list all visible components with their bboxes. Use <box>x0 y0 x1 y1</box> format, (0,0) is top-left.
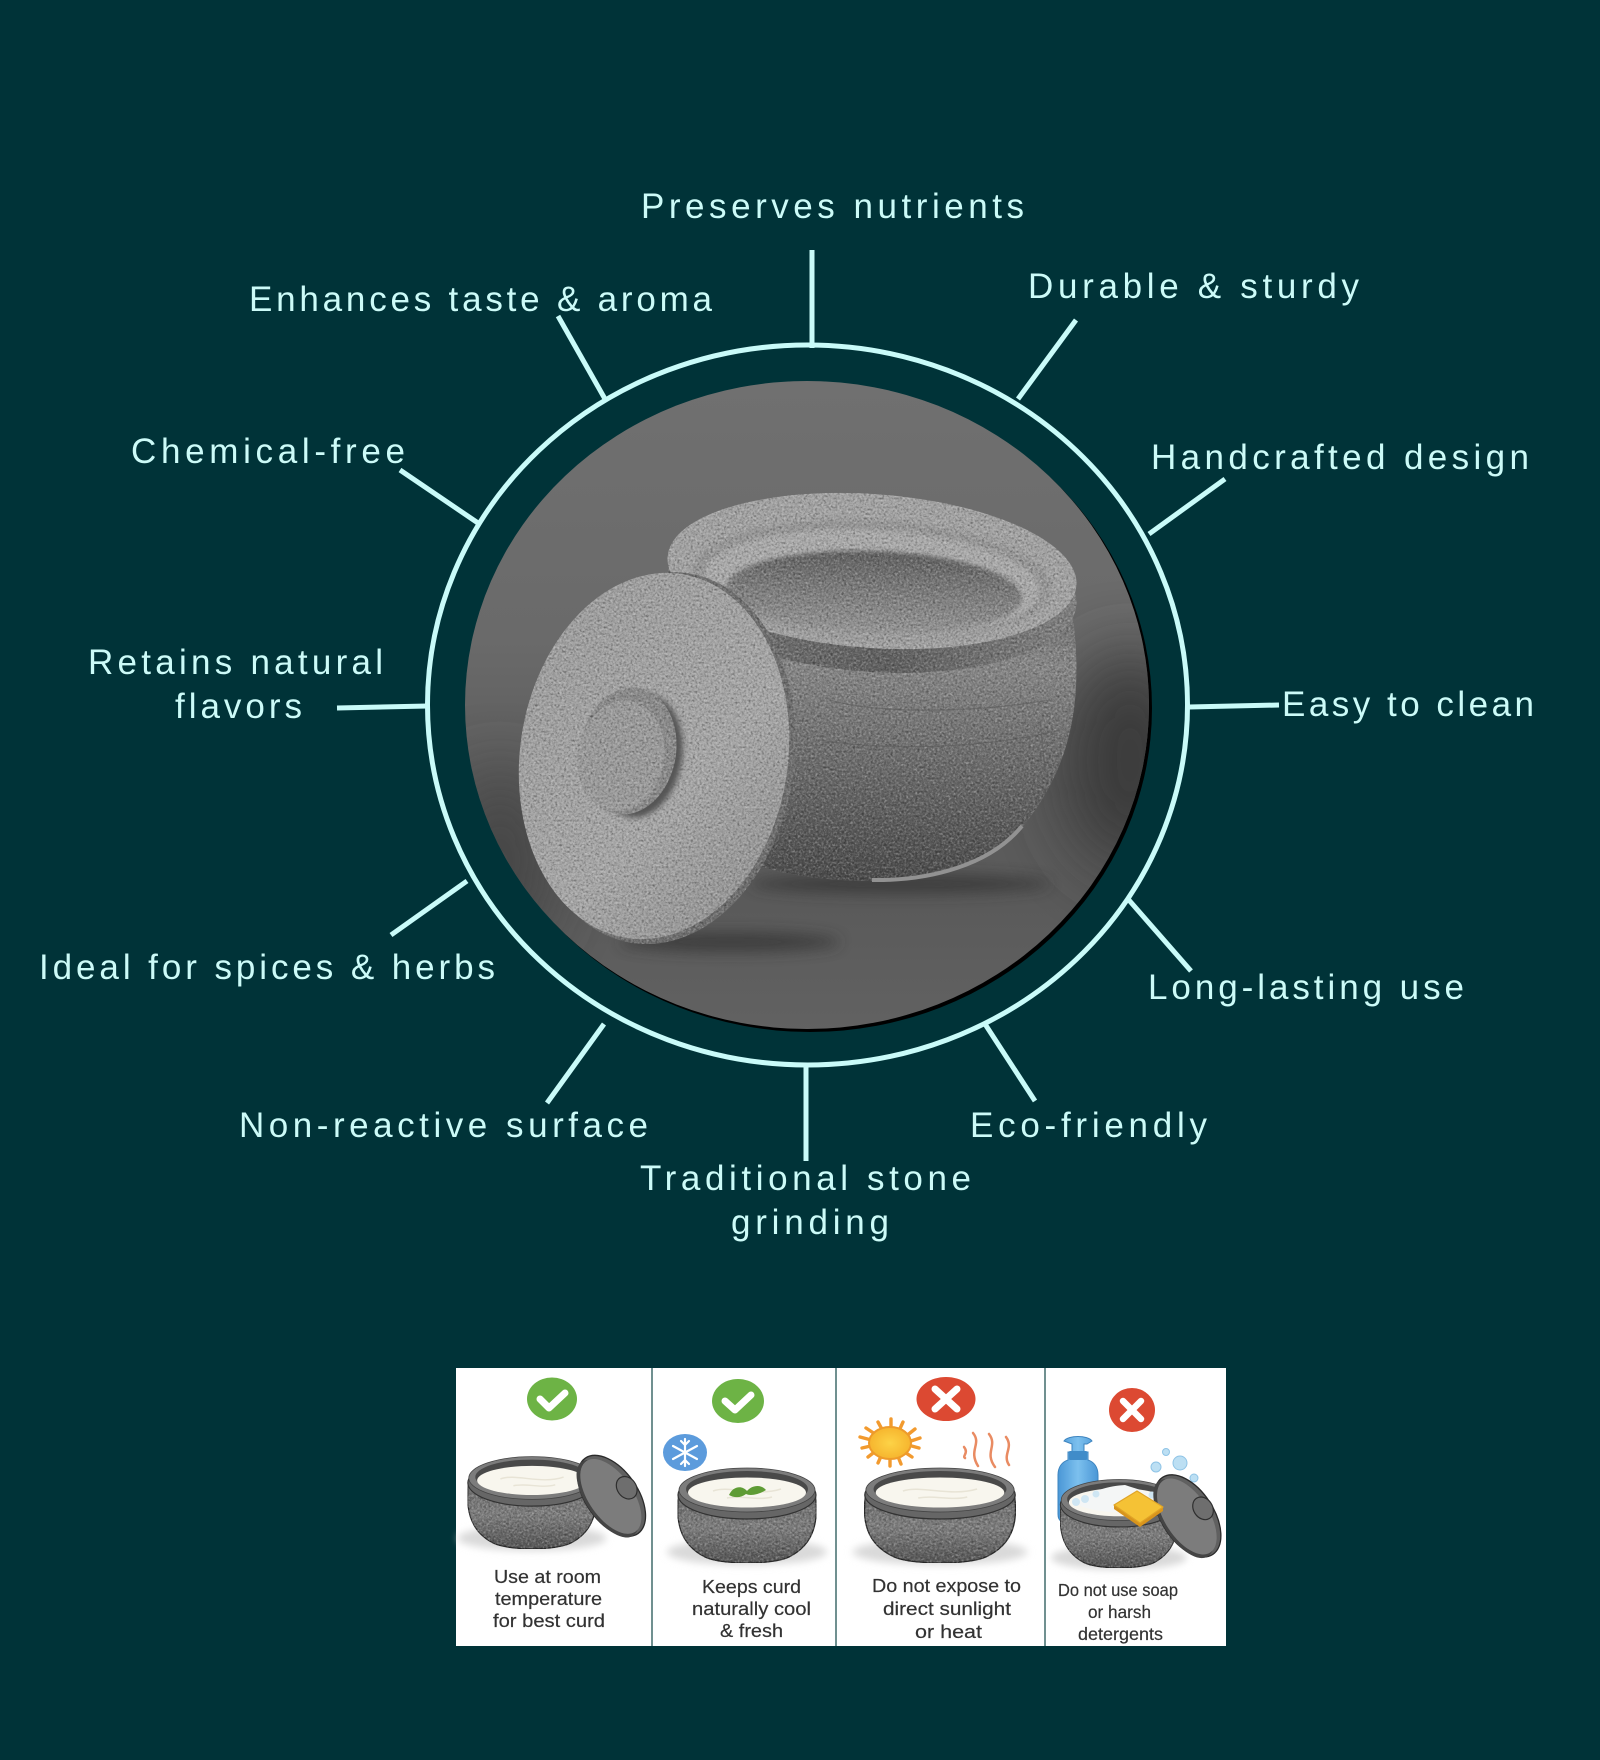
pot scratches <box>820 700 1060 840</box>
lid <box>518 572 794 944</box>
lid knob <box>578 688 686 821</box>
callout line: durable <box>1018 320 1076 399</box>
caption: Keeps curd <box>702 1576 801 1597</box>
photo: stone pot with lid <box>450 376 1200 1036</box>
pot rim <box>668 492 1076 673</box>
callout line: eco-friendly <box>985 1024 1035 1101</box>
caption: temperature <box>495 1588 602 1609</box>
label: durable: Durable & sturdy <box>1028 267 1360 306</box>
panel: usage do's and don'ts <box>456 1368 1235 1646</box>
caption: naturally cool <box>692 1598 811 1619</box>
caption: & fresh <box>720 1620 783 1641</box>
pot with foam, sponge and lid <box>1051 1463 1235 1570</box>
callout line: traditional <box>804 1067 808 1161</box>
label: traditional stone grinding: Traditional stone <box>640 1159 971 1198</box>
callout line: preserves nutrients <box>810 250 814 348</box>
pot with curd and leaf <box>667 1468 827 1565</box>
pot with lid <box>458 1443 660 1551</box>
label: long-lasting: Long-lasting use <box>1148 968 1464 1007</box>
caption: direct sunlight <box>883 1598 1011 1619</box>
callout line: enhances taste <box>558 316 605 399</box>
label: retains natural flavors: Retains natural <box>88 643 383 682</box>
pot with curd <box>853 1468 1027 1565</box>
callout line: handcrafted <box>1149 479 1225 534</box>
caption: or heat <box>915 1621 982 1642</box>
label: enhances taste: Enhances taste & aroma <box>249 280 713 319</box>
caption: for best curd <box>493 1610 605 1631</box>
caption <box>692 1576 811 1641</box>
label: traditional stone grinding <box>640 1159 971 1242</box>
icon: soap bottle <box>1058 1436 1098 1522</box>
pot body <box>762 618 1076 881</box>
icon: red cross <box>1109 1388 1155 1432</box>
caption: detergents <box>1078 1624 1163 1644</box>
card: keeps curd cool <box>663 1379 827 1641</box>
callout line: long-lasting <box>1128 899 1191 971</box>
card: avoid soap <box>1051 1388 1235 1644</box>
caption: Do not expose to <box>872 1575 1021 1596</box>
caption: Use at room <box>494 1566 601 1587</box>
caption <box>493 1566 605 1631</box>
caption: or harsh <box>1088 1602 1151 1622</box>
icon: red cross <box>916 1377 976 1421</box>
callout line: non-reactive <box>547 1024 604 1103</box>
caption <box>1058 1580 1178 1644</box>
icon: bubbles <box>1151 1448 1198 1482</box>
pot foot highlight <box>872 826 1022 880</box>
icon: green check <box>527 1378 577 1420</box>
label: retains natural flavors: flavors <box>175 687 302 726</box>
callout line: retains flavors <box>337 706 428 708</box>
label: chemical-free: Chemical-free <box>131 432 405 471</box>
callout line: chemical-free <box>400 470 478 523</box>
callout line: ideal for spices <box>391 881 467 935</box>
label: non-reactive: Non-reactive surface <box>239 1106 648 1145</box>
icon: snowflake <box>663 1434 707 1471</box>
caption: Do not use soap <box>1058 1580 1178 1600</box>
label: eco-friendly: Eco-friendly <box>970 1106 1208 1145</box>
icon: green check <box>712 1379 764 1423</box>
outer ring <box>428 345 1188 1065</box>
callout line: easy to clean <box>1189 705 1279 707</box>
card: avoid sunlight <box>853 1377 1027 1642</box>
label: traditional stone grinding: grinding <box>731 1203 889 1242</box>
icon: heat waves <box>964 1433 1009 1467</box>
icon: sun <box>860 1419 920 1466</box>
label: easy to clean: Easy to clean <box>1282 685 1534 724</box>
caption <box>872 1575 1021 1642</box>
label: retains natural flavors <box>88 643 383 726</box>
label: preserves nutrients: Preserves nutrients <box>641 187 1024 226</box>
label: handcrafted: Handcrafted design <box>1151 438 1529 477</box>
card: use at room temperature <box>458 1378 660 1631</box>
label: ideal for spices: Ideal for spices & herbs <box>39 948 495 987</box>
